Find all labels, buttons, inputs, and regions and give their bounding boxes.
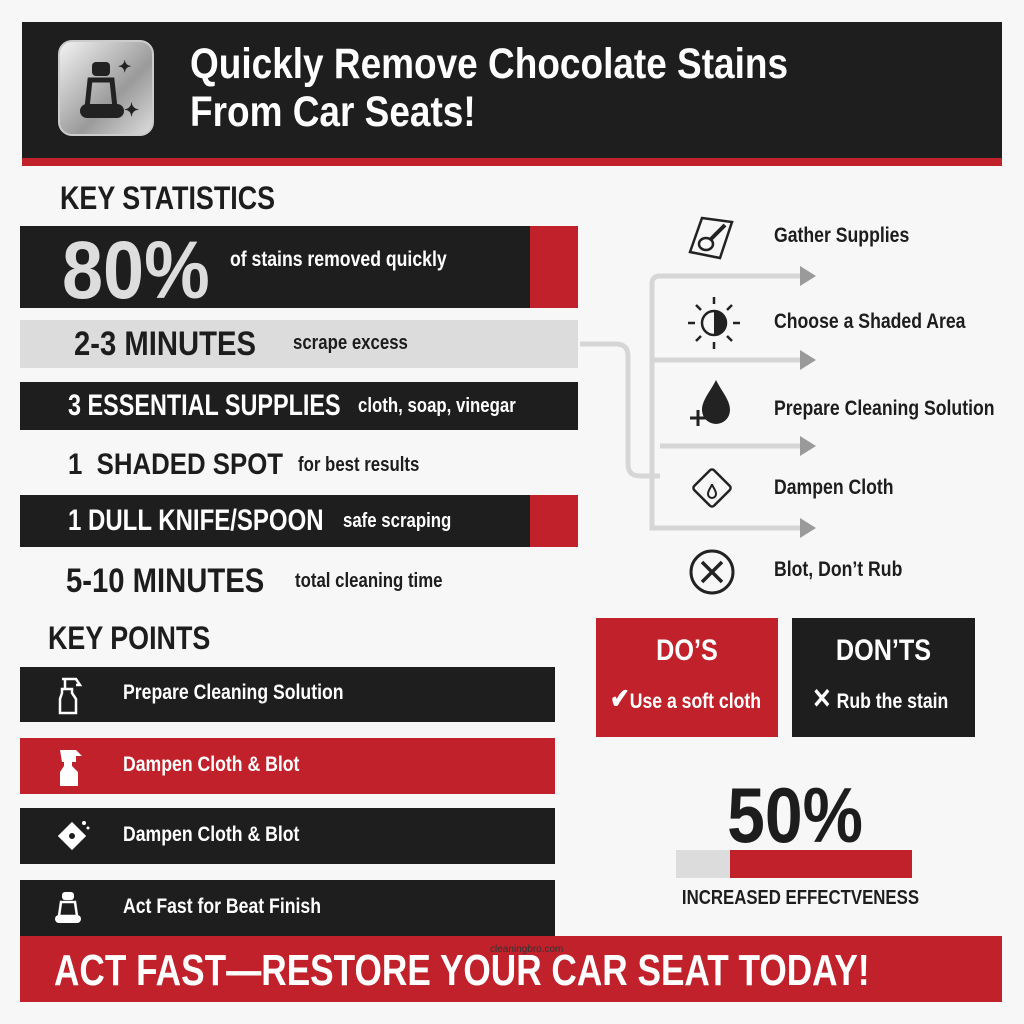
footer banner	[20, 936, 1002, 1002]
stat: 5-10 minutes: 5-10 MINUTES	[66, 562, 264, 600]
panel: don'ts: DON’TS	[836, 634, 931, 667]
key point 2	[20, 738, 555, 794]
stat: dull knife	[20, 495, 578, 547]
stat: 5-10 minutes: total cleaning time	[295, 570, 442, 592]
icon: car seat	[58, 40, 154, 136]
stat: 80%: of stains removed quickly	[230, 248, 447, 271]
panel: do's: ✔Use a soft cloth	[610, 683, 761, 714]
title: From Car Seats!	[190, 88, 476, 136]
stat: dull knife: 1 DULL KNIFE/SPOON	[68, 504, 324, 537]
panel: don'ts: ✕ Rub the stain	[812, 683, 948, 714]
key point 4	[20, 880, 555, 936]
stat: 50% effectiveness	[676, 771, 919, 909]
title: Quickly Remove Chocolate Stains	[190, 40, 788, 88]
key point 2: Dampen Cloth & Blot	[123, 753, 299, 776]
icon: seat	[55, 892, 81, 923]
step 2: shaded area	[688, 297, 966, 349]
step 1: gather supplies	[688, 216, 909, 260]
panel: do's: DO’S	[656, 634, 718, 667]
key point 3	[20, 808, 555, 864]
key point 4: Act Fast for Beat Finish	[123, 895, 321, 918]
step 3: prepare solution	[690, 380, 995, 426]
title	[190, 40, 788, 136]
key point 1: Prepare Cleaning Solution	[123, 681, 344, 704]
progress bar	[676, 850, 912, 878]
step 1: gather supplies: Gather Supplies	[774, 224, 909, 247]
stat: 80%	[20, 226, 578, 308]
stat: 5-10 minutes	[66, 562, 442, 600]
icon: half sun	[688, 297, 740, 349]
icon: spoon cloth	[688, 216, 734, 260]
panel: do's	[596, 618, 778, 737]
stat: shaded spot: for best results	[298, 454, 419, 476]
step 2: shaded area: Choose a Shaded Area	[774, 310, 965, 333]
panel: don'ts	[792, 618, 975, 737]
stat: 2-3 minutes: 2-3 MINUTES	[74, 325, 256, 363]
heading: key points: KEY POINTS	[48, 620, 210, 656]
icon: cloth	[58, 821, 90, 850]
icon: diamond drop	[692, 468, 732, 508]
stat: 50% effectiveness: INCREASED EFFECTVENESS	[682, 887, 919, 909]
step 5: blot: Blot, Don’t Rub	[774, 558, 902, 581]
icon: x circle	[690, 550, 734, 594]
step 4: dampen cloth	[692, 468, 894, 508]
icon: car seat: ✦	[118, 59, 131, 76]
stat: 2-3 minutes	[20, 320, 578, 368]
heading: key statistics: KEY STATISTICS	[60, 180, 275, 216]
footer banner: ACT FAST—RESTORE YOUR CAR SEAT TODAY!	[54, 946, 870, 995]
stat: shaded spot: 1 SHADED SPOT	[68, 448, 283, 481]
icon: spray bottle	[58, 678, 82, 714]
key point 3: Dampen Cloth & Blot	[123, 823, 299, 846]
arrows: process connectors	[580, 266, 816, 538]
stat: 2-3 minutes: scrape excess	[293, 332, 408, 354]
stat: 3 essential supplies: cloth, soap, vinegar	[358, 395, 516, 417]
icon: spray bottle	[60, 750, 82, 786]
stat: 80%: 80%	[62, 225, 210, 316]
stat: dull knife: safe scraping	[343, 510, 451, 532]
step 3: prepare solution: Prepare Cleaning Solution	[774, 397, 995, 420]
key point 1	[20, 667, 555, 722]
icon: drop plus	[690, 380, 730, 426]
icon: car seat: ✦	[124, 100, 139, 120]
step 5: blot	[690, 550, 902, 594]
stat: shaded spot	[68, 448, 419, 481]
stat: 3 essential supplies: 3 ESSENTIAL SUPPLIES	[68, 389, 341, 422]
stat: 50% effectiveness: 50%	[727, 771, 863, 859]
header banner	[22, 22, 1002, 166]
footer banner: cleaningbro.com	[490, 944, 563, 955]
stat: 3 essential supplies	[20, 382, 578, 430]
step 4: dampen cloth: Dampen Cloth	[774, 476, 894, 499]
